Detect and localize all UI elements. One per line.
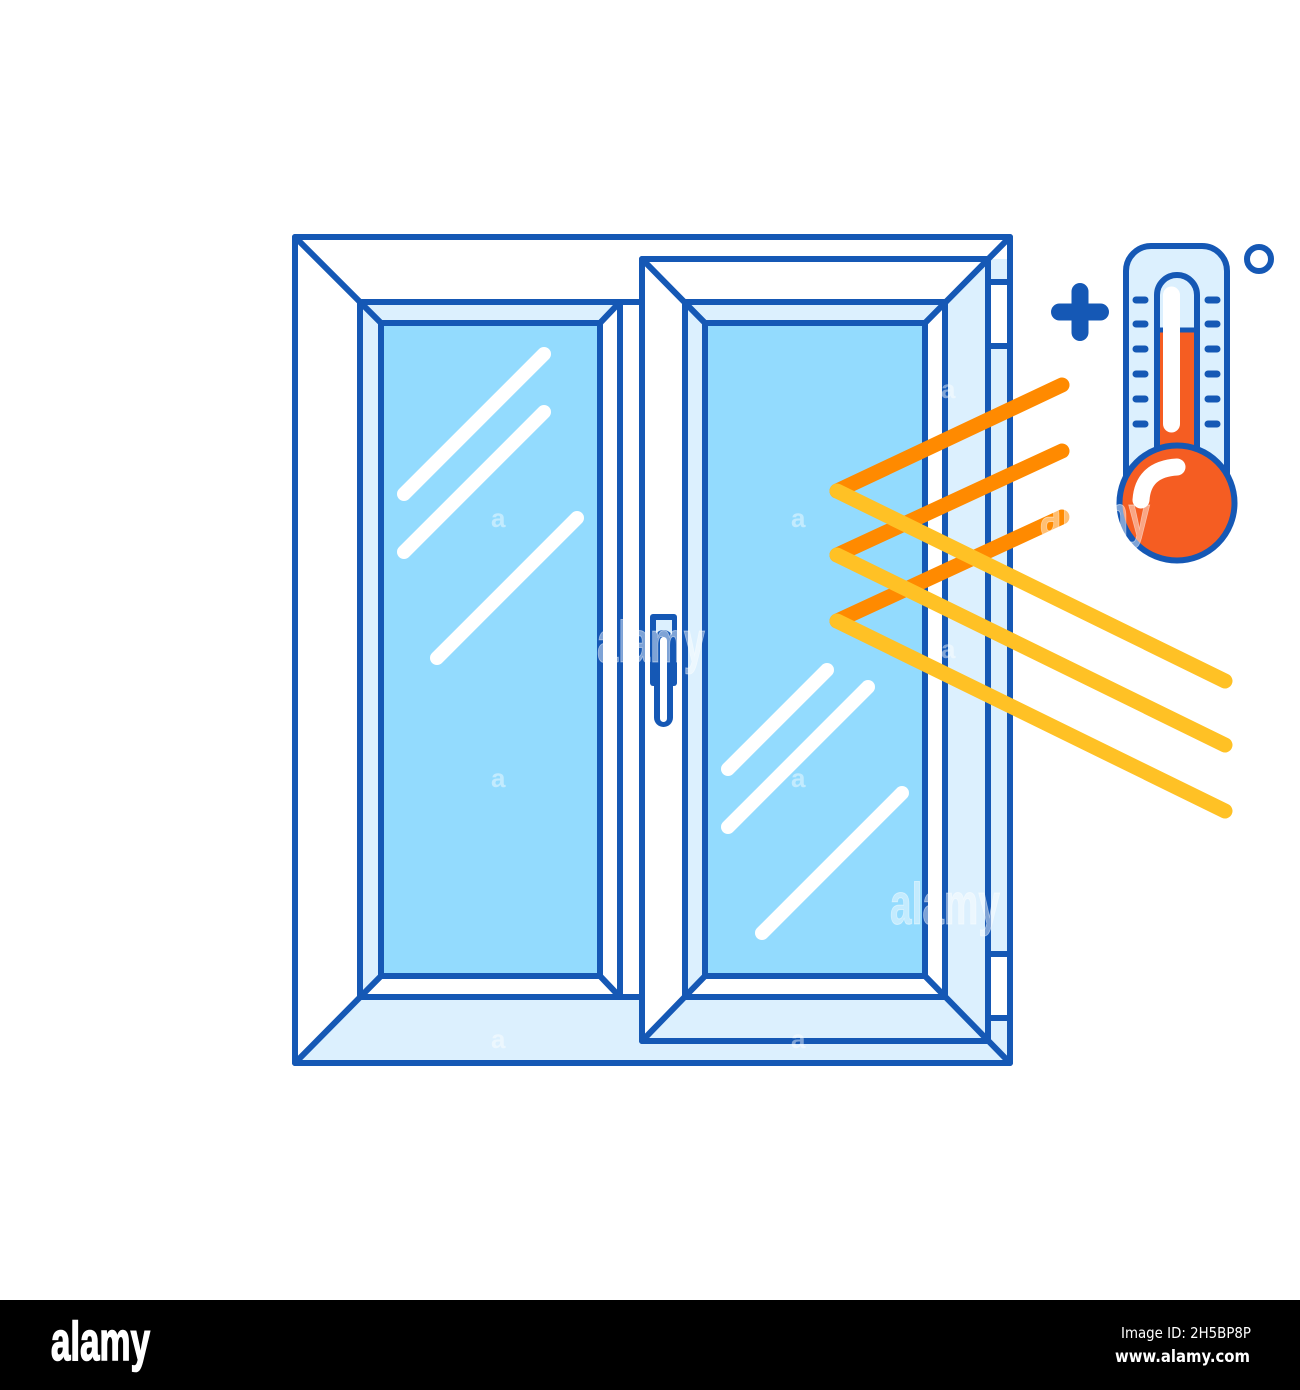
watermarks: a bbox=[491, 1024, 506, 1054]
icon: plus sign bbox=[1060, 292, 1100, 332]
thermometer bulb bbox=[1120, 446, 1234, 560]
right glass pane bbox=[705, 323, 925, 976]
left pane reflections bbox=[404, 354, 577, 658]
heat rays bbox=[837, 385, 1225, 811]
watermarks: alamy bbox=[1040, 484, 1150, 549]
bulb highlight bbox=[1141, 467, 1177, 500]
image id: Image ID: 2H5BP8P bbox=[1121, 1324, 1251, 1342]
window handle bbox=[650, 614, 677, 727]
footer logo: alamy bbox=[51, 1310, 150, 1372]
window outlines bbox=[295, 237, 1010, 1063]
left sash bbox=[360, 302, 620, 997]
watermarks: a bbox=[791, 763, 806, 793]
left glass pane bbox=[381, 323, 600, 976]
watermarks: alamy bbox=[597, 610, 705, 675]
watermarks: alamy bbox=[890, 872, 1000, 937]
watermarks: a bbox=[941, 374, 956, 404]
icon: degree symbol bbox=[1247, 247, 1271, 271]
watermarks: a bbox=[491, 763, 506, 793]
watermarks: a bbox=[941, 634, 956, 664]
thermometer body bbox=[1126, 246, 1227, 510]
thermometer tube bbox=[1157, 275, 1197, 460]
right sash bbox=[642, 259, 988, 1041]
incoming yellow rays bbox=[837, 491, 1225, 811]
thermometer scale ticks bbox=[1136, 300, 1217, 424]
footer bar bbox=[0, 1300, 1300, 1390]
reflected orange rays bbox=[837, 385, 1062, 621]
icon: thermometer bbox=[1120, 246, 1234, 560]
website: www.alamy.com bbox=[1115, 1347, 1250, 1366]
watermarks bbox=[491, 374, 1150, 1054]
outer frame fills bbox=[295, 237, 1010, 1063]
watermarks: a bbox=[491, 503, 506, 533]
watermarks: a bbox=[791, 503, 806, 533]
watermarks: a bbox=[791, 1024, 806, 1054]
right pane reflections bbox=[728, 670, 902, 933]
window bbox=[295, 237, 1010, 1063]
